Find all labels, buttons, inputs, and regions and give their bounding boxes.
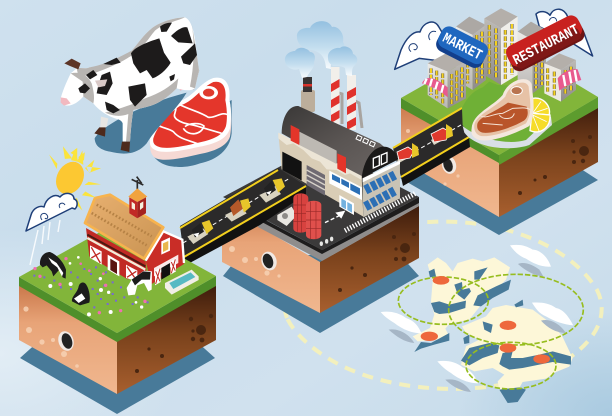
truck with cow [187, 220, 213, 244]
island shadow [223, 255, 419, 333]
pipe opening [259, 250, 279, 272]
road underside [184, 186, 306, 265]
stack one [331, 67, 340, 125]
truck with meat near factory [396, 143, 419, 163]
road edges [180, 170, 306, 257]
cloud outline right [536, 9, 593, 56]
rain [30, 220, 60, 265]
red stripes [291, 125, 346, 173]
building back left [456, 17, 486, 90]
steak shadow [154, 100, 232, 167]
world map [381, 245, 583, 403]
roof vents [356, 135, 375, 147]
map clouds with shadows [381, 245, 573, 392]
road from farm [180, 168, 306, 265]
billboard [299, 132, 337, 164]
gable doors [154, 255, 178, 285]
office entrance [339, 195, 354, 215]
island soil [222, 205, 419, 313]
building front right [544, 53, 576, 102]
dashed distribution ring [285, 222, 602, 389]
cow shadow [95, 93, 187, 154]
island shadow [400, 165, 598, 235]
left puff [285, 48, 315, 78]
crosswalk [345, 193, 415, 231]
land: cream continents [413, 257, 510, 341]
barn side doors [90, 245, 137, 281]
land: blue shaded shelves [414, 267, 571, 403]
short vent chimney [301, 77, 315, 112]
island soil [19, 285, 216, 394]
front leg back [94, 117, 108, 137]
sun disc [51, 157, 89, 199]
hay loft window [161, 237, 170, 255]
panel: farm island [19, 222, 216, 414]
sun rays [33, 137, 113, 213]
silo one [293, 193, 308, 233]
sign: market [433, 24, 491, 71]
sign: restaurant: RESTAURANT [511, 22, 582, 69]
sun with cloud and rain [26, 137, 113, 265]
gable trim [146, 231, 184, 263]
muzzle [61, 97, 71, 106]
road to restaurant [393, 108, 470, 186]
cow hoof front [121, 142, 130, 152]
marbling [157, 104, 230, 145]
truck with meat near market [431, 124, 453, 145]
cow body [61, 17, 199, 142]
arched roof [282, 106, 397, 178]
salad [462, 82, 551, 149]
big cow [61, 17, 199, 154]
building front left [428, 53, 466, 108]
arch end cap [362, 147, 398, 178]
market location dots [421, 276, 550, 364]
meadow flowers [33, 256, 149, 316]
steak side [150, 78, 231, 160]
truck with dark cow [259, 178, 285, 203]
road underside [401, 137, 470, 186]
bollards [320, 237, 333, 246]
factory [277, 106, 415, 246]
barn [40, 195, 199, 305]
barn roof [85, 195, 163, 259]
barn side wall [86, 228, 147, 283]
awning left [422, 78, 448, 97]
sign: market: MARKET [439, 31, 484, 64]
cooked steak [471, 79, 534, 140]
cloud outline left [395, 22, 453, 69]
asphalt yard [223, 145, 419, 250]
direction arrow [325, 211, 345, 223]
barn gable end [146, 232, 184, 284]
panel: city buildings [395, 8, 593, 108]
island grass [401, 40, 598, 165]
silo two [306, 201, 321, 239]
black spots [78, 23, 197, 113]
coverage circles [398, 274, 583, 389]
stack two [347, 75, 356, 130]
office side [363, 161, 400, 217]
barn wall trim [87, 238, 145, 270]
lemon slices [530, 98, 550, 132]
steak top [150, 78, 231, 152]
panel: factory island [222, 145, 419, 333]
island grass [19, 222, 216, 342]
large puff [297, 21, 344, 69]
plate with cooked steak [462, 79, 552, 149]
black and white cows [40, 252, 152, 305]
right puff [328, 46, 357, 76]
panel: market and restaurant island [400, 40, 598, 235]
slab shadow edge [258, 197, 419, 254]
raw steak [150, 78, 232, 167]
building tall centre [484, 8, 518, 85]
road centre dashes [183, 178, 290, 243]
concrete slab edge [258, 197, 419, 261]
building back right [518, 22, 546, 93]
office window band [329, 171, 362, 200]
parapet [278, 133, 362, 180]
truck with brown cow [225, 198, 251, 222]
cow udder [178, 80, 186, 91]
far leg [187, 67, 199, 90]
smokestacks [301, 67, 362, 130]
pipe opening [440, 154, 458, 176]
bone ring [199, 86, 218, 99]
ears and forelock [64, 59, 107, 87]
road centre dashes [397, 122, 466, 162]
road edges [393, 108, 469, 177]
cupola and weather vane [128, 177, 147, 218]
pipes [336, 92, 362, 128]
pipe opening [56, 329, 76, 353]
awning right [558, 69, 581, 91]
loading door [282, 152, 302, 181]
shutter door [307, 165, 325, 196]
rain cloud [26, 193, 77, 231]
road surface [180, 168, 306, 256]
air conditioner [277, 207, 294, 226]
plate rim [463, 117, 552, 148]
water trough [165, 270, 199, 295]
island soil [401, 104, 598, 217]
cow shading [71, 17, 199, 142]
road surface [393, 108, 470, 177]
land: eurasia and africa cream [461, 305, 573, 390]
smoke clouds [285, 21, 357, 78]
island shadow [20, 340, 215, 414]
front facade [278, 133, 363, 217]
